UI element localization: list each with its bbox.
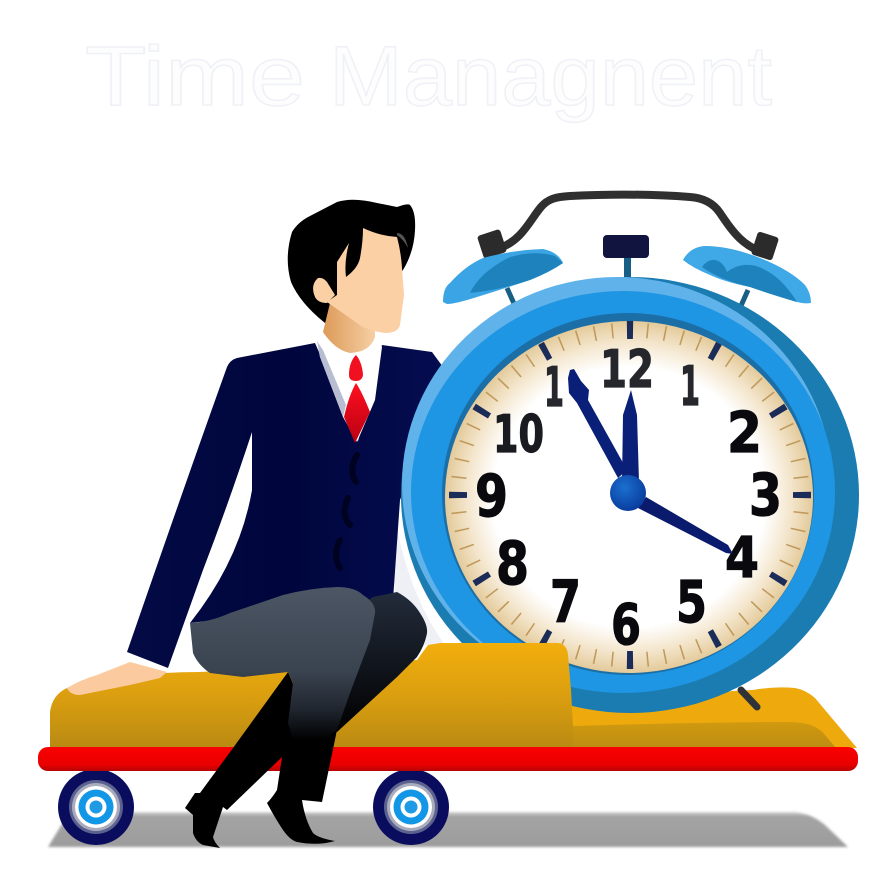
clock body ring (411, 291, 835, 693)
hair highlight (397, 233, 408, 248)
collar shade (317, 341, 346, 417)
seat gap highlight (168, 625, 200, 672)
front thigh (190, 587, 375, 740)
minute hand (568, 369, 627, 478)
man: upper body (127, 200, 450, 668)
man: legs (185, 587, 427, 848)
clock numerals: 1 (680, 355, 700, 418)
hair (288, 200, 415, 323)
clock numerals: 5 (676, 568, 707, 636)
clock face (445, 321, 813, 673)
center knob (603, 235, 649, 277)
clock numerals: 2 (727, 401, 762, 466)
clock numerals: 10 (493, 405, 544, 465)
back thigh (300, 592, 427, 732)
left hammer cap (477, 229, 507, 259)
left wheel (58, 769, 134, 845)
cushion: rear section (560, 687, 857, 748)
second hand (622, 390, 639, 482)
neck (323, 303, 375, 353)
necktie (344, 355, 370, 443)
hour hand (638, 497, 733, 554)
clock body highlight (402, 277, 832, 691)
title (85, 29, 772, 123)
right bell (683, 246, 811, 303)
right hammer cap (751, 231, 779, 261)
jacket (127, 343, 450, 668)
clock numerals: 12 (600, 340, 654, 400)
clock numerals: 9 (475, 462, 508, 530)
left bell (443, 249, 563, 304)
speckled backdrop (385, 500, 445, 645)
clock numerals: 6 (611, 593, 641, 658)
clock hub (610, 475, 646, 511)
left bell stem (507, 288, 516, 308)
jacket buttons (336, 455, 357, 568)
clock handle (500, 195, 767, 254)
cushion: front section (50, 643, 573, 748)
clock numerals: 3 (749, 461, 782, 529)
face (327, 228, 404, 333)
title: Time (85, 29, 305, 123)
wheels (58, 769, 449, 845)
title: Managnent (329, 29, 772, 123)
front lower leg and shoe (185, 672, 300, 848)
ground shadow (48, 812, 848, 847)
back lower leg and shoe (267, 690, 337, 844)
shirt collar (317, 333, 382, 442)
ear (313, 278, 335, 303)
clock numerals: 7 (550, 568, 581, 636)
red bar (38, 747, 858, 771)
clock body outer shell (401, 277, 859, 713)
right bell stem (740, 290, 748, 308)
alarm clock (401, 195, 859, 713)
clock numerals: 8 (496, 529, 529, 599)
clock numerals (475, 340, 782, 658)
clock inner rim (442, 313, 814, 675)
right wheel (373, 769, 449, 845)
man: hand (67, 662, 167, 695)
minor ticks (458, 330, 802, 660)
clock foot (741, 690, 757, 707)
clock numerals: 4 (725, 526, 759, 591)
hour ticks (458, 330, 802, 660)
clock numerals: 1 (544, 356, 564, 419)
